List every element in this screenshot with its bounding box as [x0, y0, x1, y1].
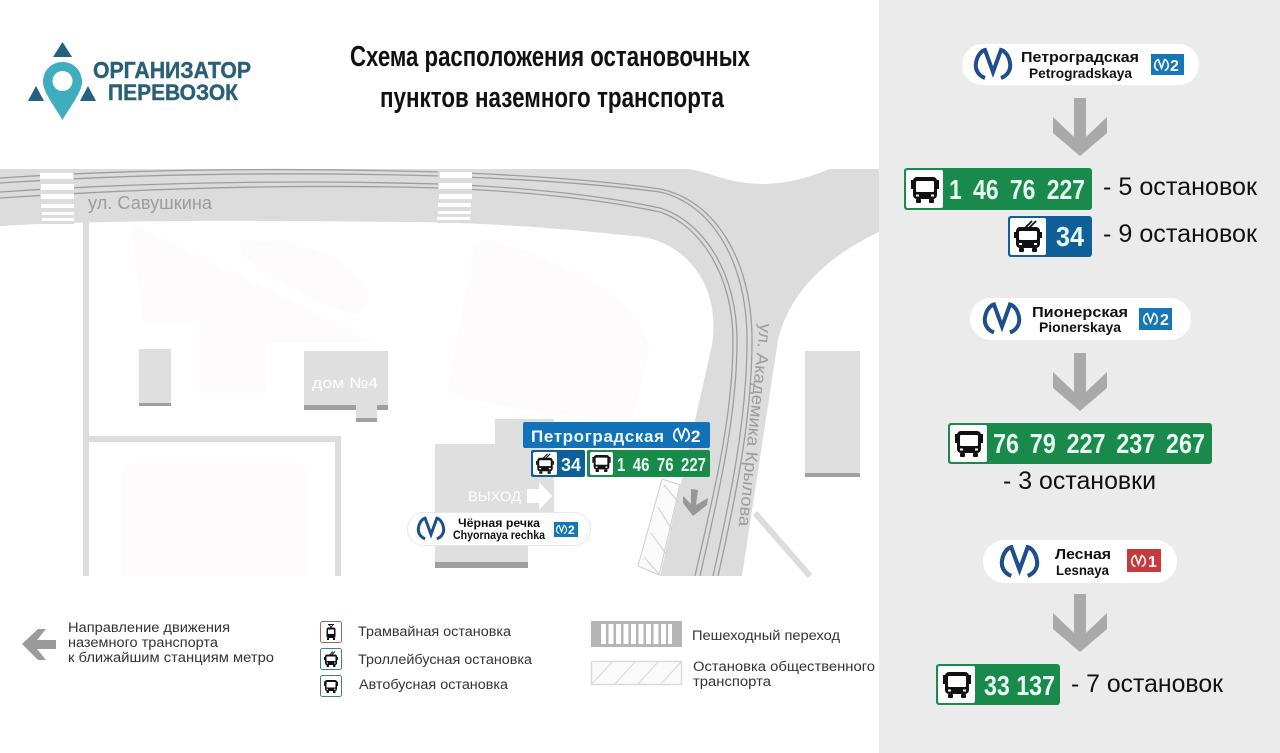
arrow down 1	[1053, 98, 1107, 156]
legend: bus stop: Автобусная остановка	[359, 677, 509, 692]
arrow down 3	[1053, 594, 1107, 652]
legend: direction arrow	[22, 620, 274, 665]
bus routes 1 46 76 227	[904, 168, 1092, 210]
map label: Чёрная речка station: Чёрная речка	[458, 518, 541, 530]
station pill: Пионерская: 2	[1160, 312, 1169, 329]
metro building with exit: ВЫХОД	[468, 488, 522, 504]
tram rails	[0, 170, 752, 576]
station pill: Пионерская: Pionerskaya	[1039, 319, 1121, 335]
right panel background	[879, 0, 1280, 753]
station pill: Петроградская: Petrogradskaya	[1029, 65, 1132, 81]
bus routes 76 79 227 237 267: 76 79 227 237 267	[993, 428, 1205, 459]
map label: bus routes: 1 46 76 227	[617, 455, 706, 475]
map label: bus routes	[587, 450, 710, 477]
text: 9 stops: - 9 остановок	[1103, 220, 1258, 248]
station pill: Лесная	[983, 540, 1177, 583]
legend: trolleybus stop	[320, 648, 533, 670]
map label: Чёрная речка station: 2	[568, 523, 575, 537]
map label: trolleybus 34: 34	[561, 455, 581, 475]
building	[139, 349, 171, 406]
logo: Организатор перевозок: ПЕРЕВОЗОК	[108, 80, 239, 105]
text: 5 stops: - 5 остановок	[1103, 173, 1258, 201]
map label: Чёрная речка station: Chyornaya rechka	[453, 530, 546, 542]
station pill: Петроградская: 2	[1170, 58, 1179, 75]
arrow down 2	[1053, 353, 1107, 411]
faint courtyard areas	[121, 223, 650, 576]
street label: Савушкина: ул. Савушкина	[88, 193, 213, 213]
legend: trolleybus stop: Троллейбусная остановка	[358, 652, 533, 667]
station pill: Лесная: Лесная	[1055, 546, 1111, 563]
trolleybus route 34	[1008, 216, 1092, 257]
trolleybus route 34: 34	[1056, 221, 1084, 252]
logo: Организатор перевозок	[28, 42, 251, 120]
text: 3 stops: - 3 остановки	[1003, 467, 1156, 495]
station pill: Пионерская	[970, 298, 1191, 340]
building: right	[805, 351, 860, 477]
metro building with exit	[435, 419, 554, 568]
station pill: Петроградская	[962, 44, 1199, 85]
building: дом №4	[304, 351, 388, 422]
legend: tram stop	[320, 622, 512, 642]
title: Схема расположения остановочных	[350, 41, 750, 73]
title: пунктов наземного транспорта	[380, 82, 725, 114]
legend: direction arrow: к ближайшим станциям метро	[68, 650, 274, 665]
side driveways	[83, 222, 341, 576]
station pill: Петроградская: Петроградская	[1021, 49, 1139, 66]
legend: public transport stop	[592, 659, 875, 689]
map label: trolleybus 34	[531, 450, 585, 477]
legend: tram stop: Трамвайная остановка	[358, 624, 512, 639]
bus routes 76 79 227 237 267	[948, 423, 1212, 464]
map label: Петроградская stop: Петроградская	[531, 427, 664, 446]
road network	[0, 169, 879, 576]
title	[350, 41, 750, 114]
legend: pedestrian crossing: Пешеходный переход	[692, 628, 840, 643]
public transport stop area	[638, 479, 680, 575]
text: 7 stops: - 7 остановок	[1071, 670, 1224, 698]
legend: direction arrow: Направление движения	[68, 620, 230, 635]
direction arrow on road	[683, 489, 708, 516]
legend: pedestrian crossing	[591, 621, 840, 647]
legend: direction arrow: наземного транспорта	[68, 635, 219, 650]
map	[0, 169, 879, 576]
bus routes 33 137	[936, 664, 1060, 705]
bus routes 33 137: 33 137	[984, 670, 1055, 701]
legend: public transport stop: Остановка общественного	[693, 659, 875, 674]
map label: Чёрная речка station	[408, 512, 590, 546]
map label: Петроградская stop: 2	[691, 427, 700, 446]
bus routes 1 46 76 227: 1 46 76 227	[949, 174, 1085, 205]
legend: public transport stop: транспорта	[693, 674, 772, 689]
logo: Организатор перевозок: ОРГАНИЗАТОР	[93, 57, 251, 83]
station pill: Лесная: Lesnaya	[1056, 562, 1109, 578]
legend: bus stop	[320, 676, 509, 696]
station pill: Пионерская: Пионерская	[1032, 304, 1128, 321]
crossings on Savushkina street	[40, 169, 472, 224]
station pill: Лесная: 1	[1148, 554, 1157, 571]
building: дом №4: дом №4	[312, 375, 378, 392]
street label: Академика Крылова: ул. Академика Крылова	[735, 323, 775, 528]
map label: Петроградская stop	[523, 422, 710, 448]
